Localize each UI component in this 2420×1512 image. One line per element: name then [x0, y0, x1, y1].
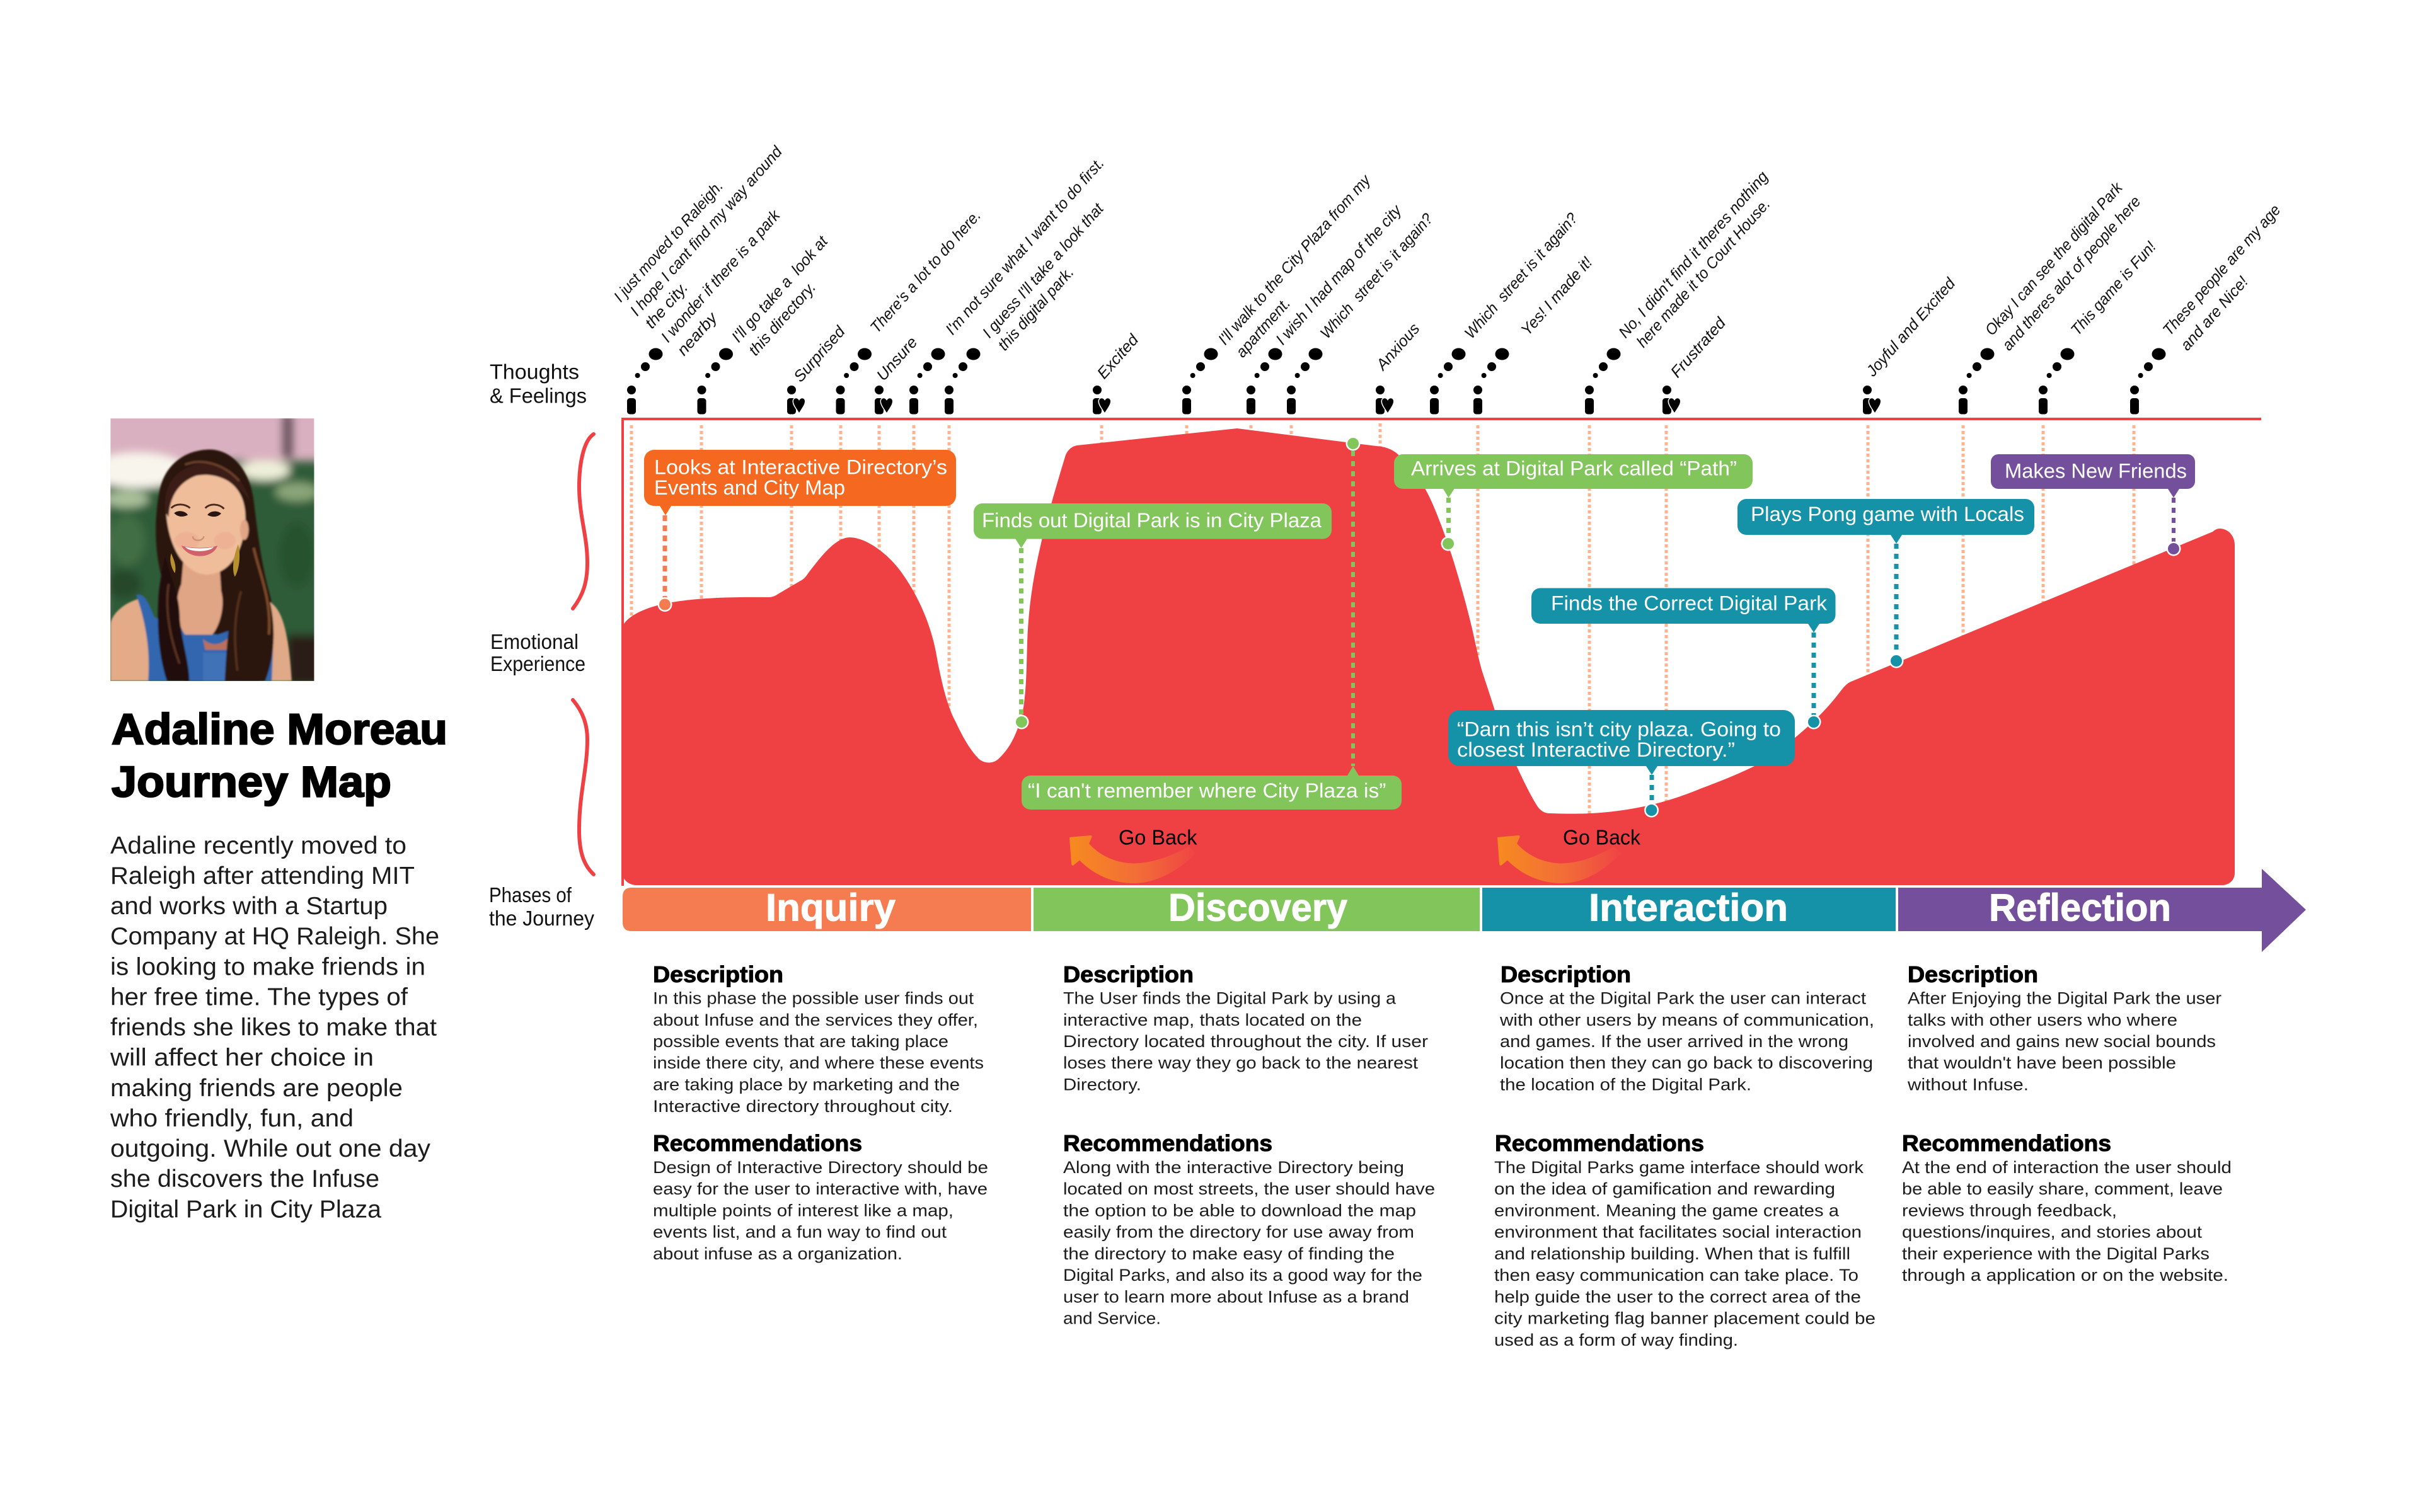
text block: persona introduction: Raleigh after attending MIT [110, 862, 415, 890]
row label: thoughts and feelings [490, 360, 587, 407]
callout: finds out digital park: Finds out Digital Park is in City Plaza [982, 509, 1322, 532]
panel: discovery recommendations: Recommendations [1063, 1130, 1272, 1156]
text block: persona introduction: is looking to make friends in [110, 954, 425, 980]
panel: inquiry recommendations: Design of Interactive Directory should be [653, 1158, 988, 1177]
thought and feeling statements: here made it to Court House. [1634, 195, 1774, 351]
chart: emotional experience curve [621, 428, 2235, 885]
panel: interaction description: location then they can go back to discovering [1500, 1053, 1873, 1072]
thought and feeling statements: apartment. [1233, 295, 1294, 361]
thought and feeling statements: I'm not sure what I want to do first. [942, 154, 1108, 338]
panel: reflection description: without Infuse. [1907, 1075, 2029, 1094]
phase bar: reflection arrow: Reflection [1989, 886, 2171, 929]
thought and feeling statements: I wonder if there is a park [658, 206, 784, 346]
photo: portrait of Adaline [110, 418, 314, 681]
thought and feeling statements: I'll walk to the City Plaza from my [1215, 171, 1374, 348]
panel: interaction recommendations [1494, 1130, 1876, 1349]
text block: persona introduction: she discovers the Infuse [110, 1166, 379, 1193]
thought and feeling statements: and are Nice! [2177, 273, 2252, 354]
row label: emotional experience: Experience [490, 652, 585, 675]
panel: interaction recommendations: The Digital Parks game interface should work [1494, 1158, 1864, 1177]
callout: finds the correct digital park [1531, 588, 1835, 730]
panel: discovery description: Directory. [1063, 1075, 1141, 1094]
row label: phases of the journey: the Journey [489, 907, 594, 930]
title: Journey Map [112, 757, 391, 806]
panel: discovery recommendations: located on most streets, the user should have [1063, 1179, 1435, 1198]
icons: thinking and feeling figures [627, 348, 2165, 415]
callout: plays pong game: Plays Pong game with Locals [1751, 503, 2024, 525]
panel: reflection recommendations [1902, 1130, 2232, 1285]
panel: interaction description [1499, 961, 1874, 1094]
phase bar: reflection arrow [1898, 869, 2306, 952]
thought and feeling statements: the city. [642, 279, 691, 332]
thought and feeling statements: Which street is it again? [1317, 210, 1437, 342]
panel: discovery description: Description [1063, 961, 1194, 987]
callout: can't remember city plaza [1022, 436, 1402, 810]
panel: reflection recommendations: Recommendations [1902, 1130, 2111, 1156]
panel: reflection recommendations: through a application or on the website. [1902, 1266, 2228, 1285]
panel: inquiry recommendations [653, 1130, 988, 1263]
panel: reflection description [1907, 961, 2221, 1094]
panel: reflection description: that wouldn't have been possible [1908, 1053, 2176, 1072]
panel: interaction recommendations: and relationship building. When that is fulfill [1494, 1244, 1850, 1263]
frame: emotional experience axis lines [623, 419, 2261, 886]
thought and feeling statements: Excited [1094, 331, 1143, 382]
arrow: go back to discovery [1497, 835, 1622, 883]
callout: makes new friends [1991, 454, 2195, 556]
panel: interaction recommendations: then easy communication can take place. To [1494, 1266, 1858, 1285]
panel: discovery recommendations: easily from the directory for use away from [1063, 1222, 1414, 1241]
panel: inquiry recommendations: multiple points of interest like a map, [653, 1201, 954, 1220]
row label: thoughts and feelings: Thoughts [490, 360, 579, 383]
panel: reflection recommendations: their experience with the Digital Parks [1902, 1244, 2210, 1263]
panel: reflection recommendations: reviews through feedback, [1902, 1201, 2117, 1220]
thought and feeling statements: Yes! I made it! [1518, 254, 1596, 339]
panel: interaction recommendations: environment. Meaning the game creates a [1494, 1201, 1840, 1220]
text block: persona introduction: her free time. The types of [110, 984, 408, 1011]
phase bar: discovery [1034, 886, 1480, 931]
title [112, 705, 447, 806]
panel: interaction recommendations: on the idea of gamification and rewarding [1494, 1179, 1835, 1198]
callout: makes new friends: Makes New Friends [2005, 460, 2187, 483]
panel: reflection description: Description [1908, 961, 2038, 987]
panel: inquiry description: Interactive directory throughout city. [653, 1097, 953, 1116]
panel: interaction recommendations: used as a form of way finding. [1494, 1331, 1738, 1349]
callout: arrives at digital park [1394, 454, 1753, 551]
thought and feeling statements [611, 142, 2284, 386]
thought and feeling statements: I wish I had map of the city [1272, 201, 1405, 348]
thought and feeling statements: Unsure [873, 333, 921, 384]
callout: arrives at digital park: Arrives at Digital Park called “Path” [1411, 457, 1737, 480]
panel: inquiry description: Description [653, 961, 783, 987]
thought and feeling statements: this directory. [746, 278, 819, 359]
panel: discovery description [1063, 961, 1428, 1094]
callout: darn this isn't city plaza: closest Interactive Directory.” [1457, 738, 1735, 761]
panel: discovery recommendations [1063, 1130, 1435, 1328]
panel: reflection recommendations: questions/inquires, and stories about [1902, 1222, 2203, 1241]
callout: finds the correct digital park: Finds the Correct Digital Park [1551, 592, 1828, 615]
callout: darn this isn't city plaza: “Darn this isn’t city plaza. Going to [1457, 718, 1781, 741]
text block: persona introduction: Adaline recently moved to [110, 832, 406, 859]
panel: reflection description: involved and gains new social bounds [1908, 1032, 2216, 1051]
thought and feeling statements: I hope I cant find my way around [627, 142, 786, 319]
panel: inquiry description: about Infuse and the services they offer, [653, 1011, 978, 1029]
thought and feeling statements: These people are my age [2160, 201, 2284, 339]
panel: inquiry recommendations: easy for the user to interactive with, have [653, 1179, 988, 1198]
brace: emotional experience [573, 434, 594, 874]
arrow: go back to inquiry [1069, 835, 1196, 883]
callout: looks at interactive directory: Events and City Map [654, 476, 845, 499]
thought and feeling statements: This game is Fun! [2068, 238, 2160, 339]
callout: can't remember city plaza: “I can't remember where City Plaza is” [1028, 779, 1386, 802]
panel: discovery recommendations: Along with the interactive Directory being [1063, 1158, 1404, 1177]
panel: discovery recommendations: the option to be able to download the map [1063, 1201, 1416, 1220]
panel: discovery description: interactive map, thats located on the [1063, 1011, 1362, 1029]
thought and feeling statements: this digital park. [994, 263, 1078, 354]
thought and feeling statements: nearby [674, 309, 722, 359]
text block: persona introduction: outgoing. While out one day [110, 1135, 431, 1162]
panel: discovery description: loses there way they go back to the nearest [1063, 1053, 1419, 1072]
text block: persona introduction: will affect her choice in [110, 1045, 374, 1071]
panel: inquiry description: In this phase the possible user finds out [653, 989, 974, 1008]
panel: interaction recommendations: city marketing flag banner placement could be [1494, 1309, 1876, 1328]
text block: persona introduction: and works with a Startup [110, 893, 388, 920]
panel: discovery recommendations: the directory to make easy of finding the [1063, 1244, 1395, 1263]
panel: reflection recommendations: be able to easily share, comment, leave [1902, 1179, 2223, 1198]
phase bar: inquiry: Inquiry [766, 886, 896, 929]
thought and feeling statements: Okay I can see the digital Park [1982, 178, 2126, 339]
panel: inquiry description: possible events that are taking place [653, 1032, 948, 1051]
row label: phases of the journey: Phases of [489, 883, 572, 907]
panel: discovery recommendations: Digital Parks, and also its a good way for the [1063, 1266, 1422, 1285]
panel: reflection description: talks with other users who where [1908, 1011, 2177, 1029]
row label: emotional experience: Emotional [490, 630, 579, 653]
text block: persona introduction [110, 832, 439, 1223]
panel: inquiry recommendations: events list, and a fun way to find out [653, 1222, 947, 1241]
panel: inquiry description: are taking place by marketing and the [653, 1075, 960, 1094]
phase bar: interaction: Interaction [1589, 886, 1788, 929]
thought and feeling statements: Surprised [790, 323, 849, 386]
panel: interaction description: Once at the Digital Park the user can interact [1500, 989, 1867, 1008]
panel: discovery recommendations: and Service. [1063, 1309, 1161, 1328]
panel: discovery description: The User finds the Digital Park by using a [1063, 989, 1397, 1008]
thought and feeling statements: Frustrated [1668, 314, 1730, 381]
title: Adaline Moreau [112, 705, 447, 753]
thought and feeling statements: Which street is it again? [1461, 210, 1581, 342]
text block: persona introduction: Digital Park in City Plaza [110, 1196, 381, 1223]
panel: interaction recommendations: Recommendations [1495, 1130, 1704, 1156]
callout: finds out digital park [974, 503, 1332, 730]
callout: darn this isn't city plaza [1448, 710, 1795, 818]
panel: discovery description: Directory located throughout the city. If user [1063, 1032, 1428, 1051]
thought and feeling statements: I guess I'll take a look that [979, 200, 1107, 341]
panel: reflection recommendations: At the end of interaction the user should [1902, 1158, 2232, 1177]
row label: emotional experience [490, 630, 585, 675]
panel: interaction description: and games. If the user arrived in the wrong [1500, 1032, 1848, 1051]
panel: discovery recommendations: user to learn more about Infuse as a brand [1063, 1288, 1409, 1307]
panel: interaction description: Description [1501, 961, 1631, 987]
panel: interaction description: the location of the Digital Park. [1500, 1075, 1751, 1094]
text block: persona introduction: making friends are people [110, 1075, 403, 1102]
phase bar: interaction [1482, 886, 1896, 931]
thought and feeling statements: Anxious [1372, 320, 1423, 374]
thought and feeling statements: I'll go take a look at [729, 232, 832, 346]
panel: inquiry recommendations: about infuse as a organization. [653, 1244, 902, 1263]
thought and feeling statements: Joyful and Excited [1862, 274, 1959, 381]
thought and feeling statements: There's a lot to do here. [867, 207, 984, 336]
thought and feeling statements: No, I didn't find it theres nothing [1615, 168, 1772, 341]
text block: persona introduction: friends she likes to make that [110, 1014, 437, 1041]
row label: phases of the journey [489, 883, 594, 930]
text block: persona introduction: Company at HQ Raleigh. She [110, 923, 439, 950]
phase bar: inquiry [623, 886, 1031, 931]
phase bar: discovery: Discovery [1168, 886, 1347, 929]
row label: thoughts and feelings: & Feelings [490, 384, 587, 407]
label: go back: Go Back [1119, 825, 1197, 849]
panel: reflection description: After Enjoying the Digital Park the user [1908, 989, 2221, 1008]
callout: plays pong game [1737, 499, 2034, 668]
text block: persona introduction: who friendly, fun, and [110, 1105, 354, 1132]
callout: looks at interactive directory [644, 450, 956, 612]
panel: inquiry description [653, 961, 984, 1116]
panel: interaction recommendations: help guide the user to the correct area of the [1494, 1288, 1861, 1307]
panel: inquiry recommendations: Recommendations [653, 1130, 862, 1156]
thought and feeling statements: I just moved to Raleigh. [611, 177, 727, 306]
panel: interaction description: with other users by means of communication, [1499, 1011, 1874, 1029]
panel: interaction recommendations: environment that facilitates social interaction [1494, 1222, 1862, 1241]
panel: inquiry description: inside there city, and where these events [653, 1053, 984, 1072]
thought and feeling statements: and theres alot of people here [1999, 193, 2145, 354]
callout: looks at interactive directory: Looks at Interactive Directory’s [654, 456, 947, 479]
label: go back: Go Back [1563, 825, 1640, 849]
